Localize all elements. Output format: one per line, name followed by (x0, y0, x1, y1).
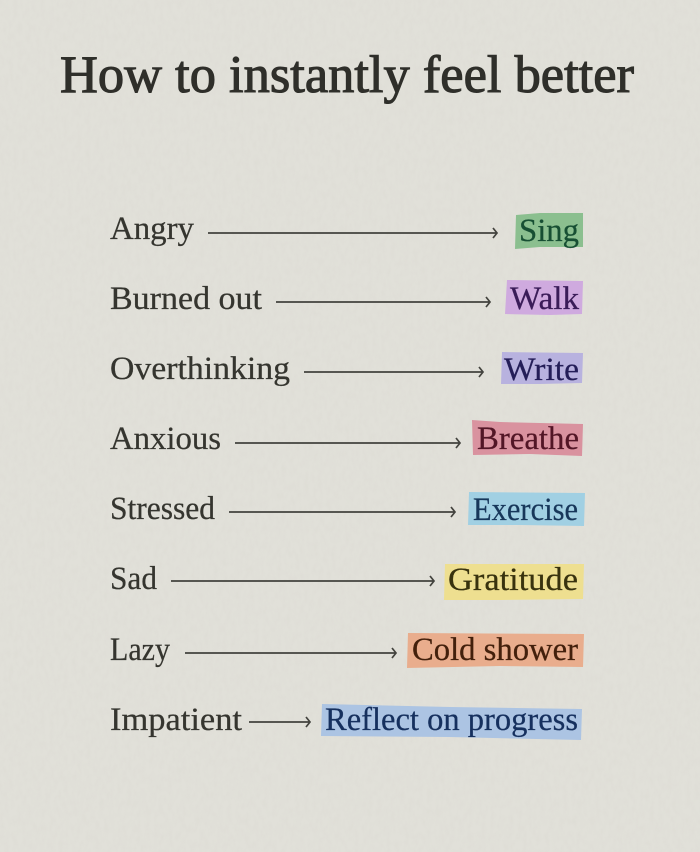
row: Sad to Gratitude: Gratitude (448, 562, 578, 598)
row: Impatient to Reflect on progress: Impatient (110, 702, 242, 738)
row: Angry to Sing (110, 211, 583, 249)
row: Sad to Gratitude (110, 561, 584, 600)
row: Sad to Gratitude: Sad (110, 561, 157, 597)
row: Burned out to Walk: Walk (510, 281, 579, 317)
row: Overthinking to Write: Overthinking (110, 351, 290, 387)
row: Lazy to Cold shower (110, 632, 584, 668)
row: Angry to Sing: Angry (110, 211, 194, 247)
row: Stressed to Exercise: Exercise (473, 492, 578, 528)
row: Stressed to Exercise (110, 491, 585, 528)
row: Anxious to Breathe: Anxious (110, 421, 221, 457)
title: How to instantly feel better (60, 46, 634, 104)
row: Burned out to Walk (110, 280, 583, 317)
row: Stressed to Exercise: Stressed (110, 491, 215, 527)
row: Anxious to Breathe (110, 420, 583, 457)
row: Anxious to Breathe: Breathe (477, 421, 579, 457)
row: Overthinking to Write: Write (504, 352, 579, 388)
row: Lazy to Cold shower: Lazy (110, 632, 170, 668)
row: Angry to Sing: Sing (519, 213, 579, 249)
row: Lazy to Cold shower: Cold shower (412, 632, 578, 668)
row: Impatient to Reflect on progress (110, 702, 582, 740)
row: Burned out to Walk: Burned out (110, 281, 262, 317)
row: Overthinking to Write (110, 351, 583, 388)
row: Impatient to Reflect on progress: Reflect on progress (325, 702, 578, 738)
